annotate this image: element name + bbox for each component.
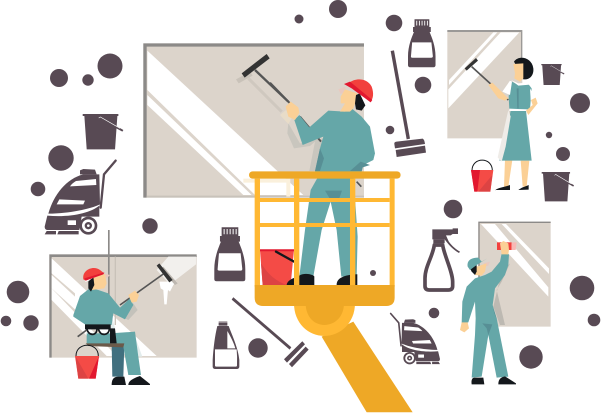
panel: main window xyxy=(143,43,364,198)
squeegee handle xyxy=(270,83,321,142)
collar xyxy=(511,80,530,86)
torso folds xyxy=(315,148,370,171)
basket floor xyxy=(255,285,395,306)
head xyxy=(468,258,490,276)
cleaned area xyxy=(157,257,196,284)
red bucket xyxy=(75,345,99,379)
torso and arm xyxy=(294,108,375,172)
hand xyxy=(286,102,299,120)
worker shoes xyxy=(112,376,150,385)
lift joint xyxy=(294,303,355,336)
worker legs xyxy=(299,173,358,277)
icon: floor cleaning machine left xyxy=(45,161,116,235)
arm reflection xyxy=(118,303,138,320)
squeegee xyxy=(465,58,478,71)
head xyxy=(338,79,373,112)
panel: woman's window xyxy=(447,30,522,138)
squeegee handle xyxy=(472,67,508,100)
torso and arm xyxy=(73,288,133,325)
red bucket xyxy=(260,249,294,285)
raised hand xyxy=(500,241,509,254)
icon: small bucket right xyxy=(541,64,564,85)
squeegee xyxy=(242,54,361,187)
panel: rope access window xyxy=(49,230,197,358)
rope xyxy=(108,230,110,325)
panel: wiped window xyxy=(478,222,551,327)
back leg xyxy=(112,345,124,377)
head xyxy=(513,58,533,82)
icon: detergent jug xyxy=(213,321,239,369)
hand xyxy=(128,291,139,303)
worker shoes xyxy=(287,274,357,285)
icon: bottle top xyxy=(408,19,436,67)
bodice xyxy=(509,81,532,109)
woman cleaning window xyxy=(471,58,538,192)
arm reflection xyxy=(287,123,323,171)
squeegee xyxy=(157,263,178,285)
legs xyxy=(504,160,529,187)
shoes xyxy=(471,376,516,384)
right arm xyxy=(526,88,538,115)
icon: large bucket right xyxy=(542,172,574,201)
main worker upper body xyxy=(270,79,375,172)
lift arm xyxy=(322,322,413,412)
icon: floor cleaning machine lower right xyxy=(391,313,440,364)
soap drips xyxy=(159,282,177,304)
squeegee reflection xyxy=(236,72,282,112)
icon: mop top xyxy=(391,50,426,157)
hand reflection xyxy=(280,110,292,124)
lower hand xyxy=(460,322,469,332)
shoes xyxy=(495,185,529,190)
red bucket xyxy=(471,160,493,192)
icon: spray bottle xyxy=(425,228,460,290)
red cloth xyxy=(497,242,517,250)
harness xyxy=(78,324,117,343)
head xyxy=(83,268,110,292)
belt xyxy=(509,109,526,111)
left sleeve xyxy=(502,81,512,95)
icon: bottle centre xyxy=(214,227,245,281)
body fold xyxy=(482,307,498,335)
apron xyxy=(498,110,511,162)
worker wiping window xyxy=(460,241,517,384)
body xyxy=(462,253,509,378)
basket railing xyxy=(249,171,401,287)
panel: worker on lift xyxy=(236,54,361,187)
bodice dart xyxy=(517,88,519,108)
skirt xyxy=(499,111,532,161)
pale leg reflection xyxy=(110,315,142,357)
seat board xyxy=(86,343,124,347)
left arm xyxy=(488,83,508,101)
shadow on window xyxy=(493,263,510,325)
icon: bucket upper left xyxy=(83,114,123,149)
rope access worker xyxy=(73,268,163,385)
aerial lift basket xyxy=(249,171,413,412)
front leg xyxy=(87,332,141,375)
squeegee handle xyxy=(120,274,163,305)
icon: mop bottom xyxy=(232,297,309,367)
